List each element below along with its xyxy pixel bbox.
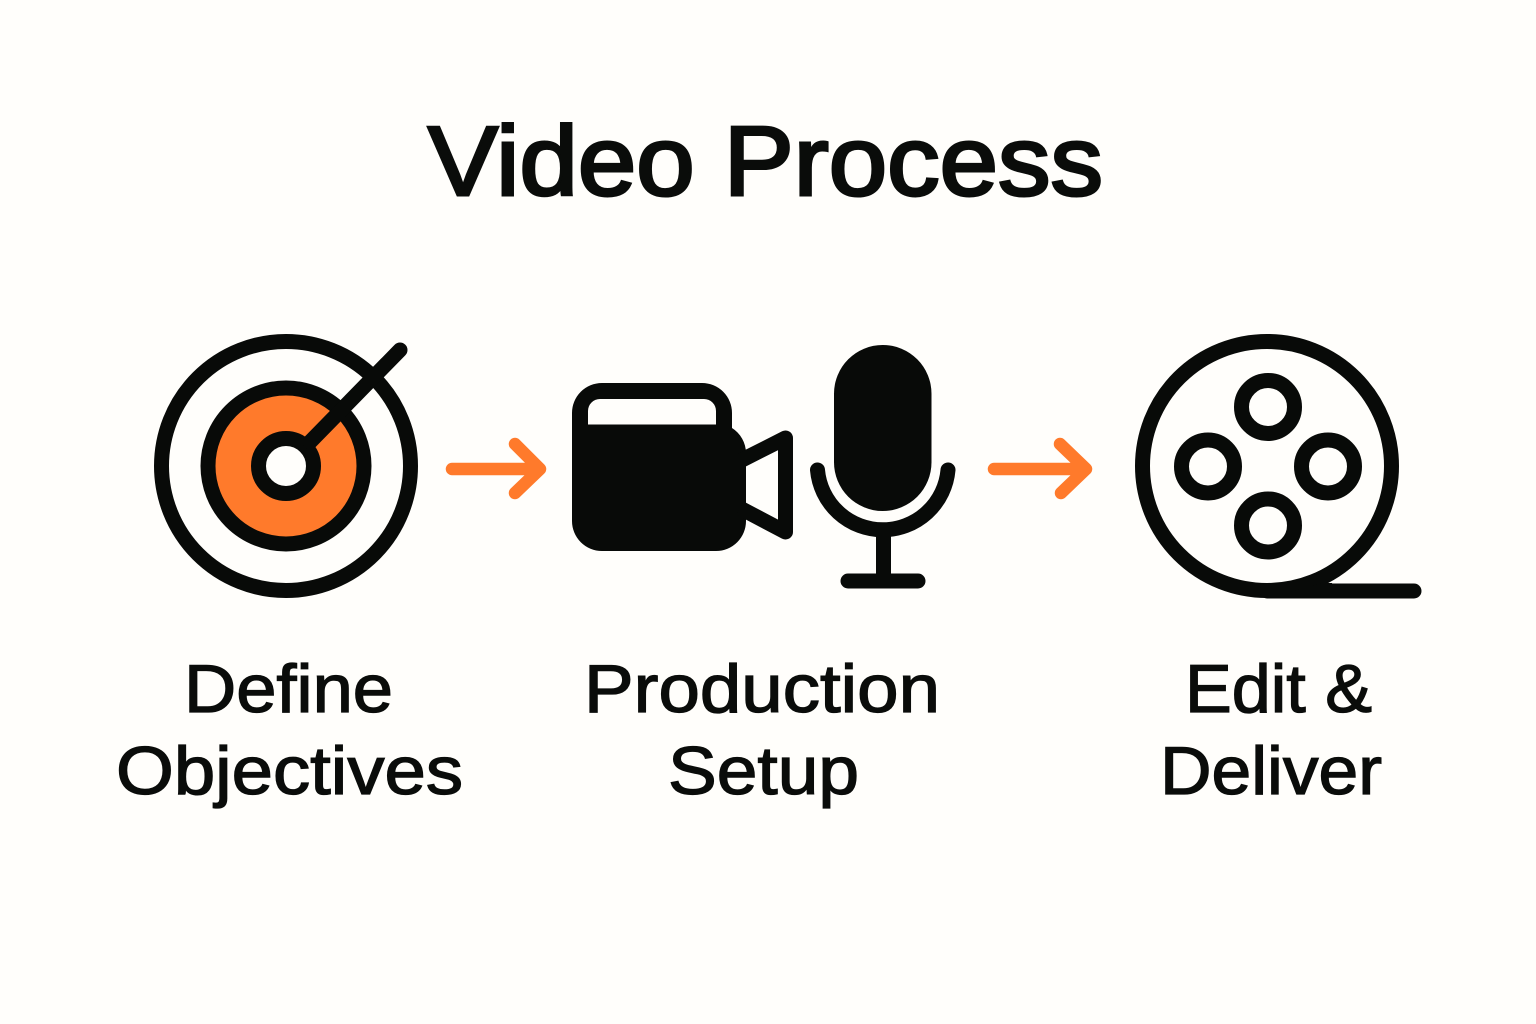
title: Video Process <box>428 106 1103 216</box>
label: production setup: Production <box>584 651 940 727</box>
label: edit and deliver <box>1160 651 1382 809</box>
label: production setup: Setup <box>668 733 859 809</box>
icon: video camera <box>572 383 786 551</box>
label: define objectives <box>116 651 463 809</box>
label: production setup <box>584 651 940 809</box>
icon: microphone <box>818 345 948 581</box>
label: define objectives: Objectives <box>116 733 463 809</box>
icon: film reel <box>1142 342 1414 592</box>
label: edit and deliver: Deliver <box>1160 733 1382 809</box>
arrow: step 2 to step 3 <box>994 444 1086 493</box>
label: edit and deliver: Edit & <box>1185 651 1372 727</box>
label: define objectives: Define <box>184 651 393 727</box>
icon: target with dart <box>162 342 410 590</box>
arrow: step 1 to step 2 <box>452 444 540 493</box>
